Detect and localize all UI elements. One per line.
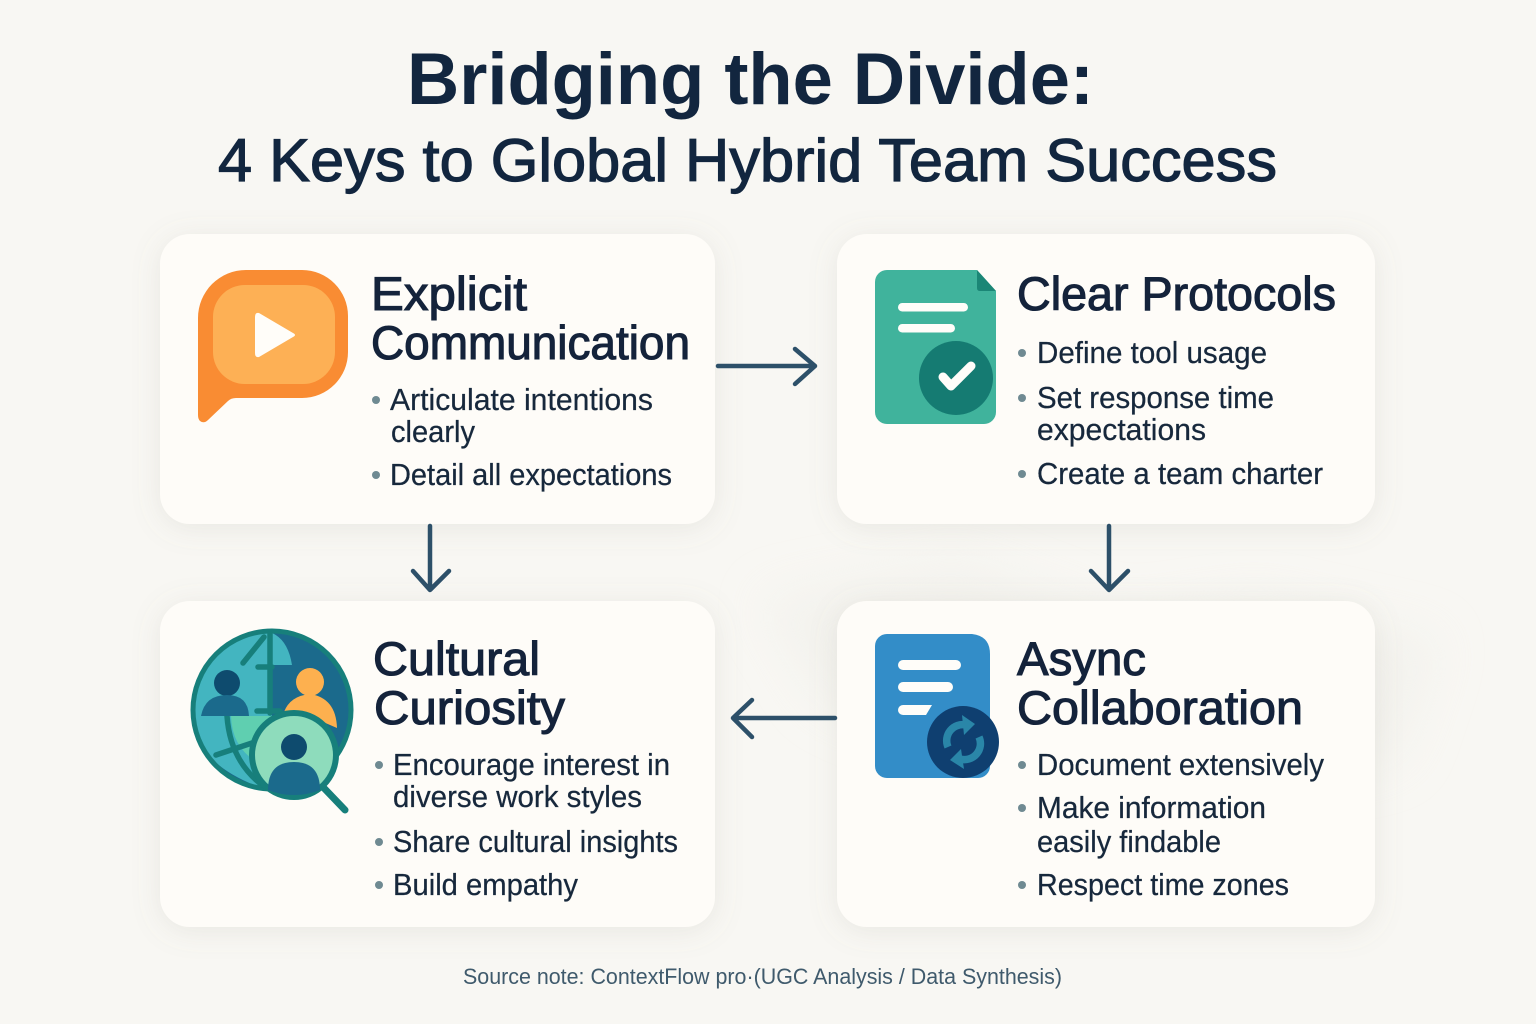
bullet list: Articulate intentions (390, 383, 653, 417)
bullet list: Respect time zones (1037, 868, 1289, 902)
icon: speech bubble with play button (198, 270, 348, 422)
bullet list: Define tool usage (1037, 336, 1267, 370)
source note: Source note: ContextFlow pro·(UGC Analysis / Data Synthesis) (463, 964, 1062, 989)
bullet list: Set response time (1037, 381, 1274, 415)
icon: document with check mark (875, 270, 996, 424)
bullet list: expectations (1037, 413, 1206, 447)
heading: Async (1017, 632, 1146, 685)
panel: explicit communication (160, 234, 715, 524)
bullet list: Detail all expectations (390, 458, 672, 492)
title: Bridging the Divide: (407, 39, 1094, 120)
heading: Clear Protocols (1017, 267, 1336, 320)
bullet list: Create a team charter (1037, 457, 1323, 491)
arrow: explicit communication to clear protocols (718, 349, 815, 384)
heading (1017, 632, 1303, 734)
bullet list (1018, 748, 1325, 902)
bullet list: Share cultural insights (393, 825, 678, 859)
bullet list: clearly (391, 415, 476, 449)
panel: async collaboration (837, 601, 1375, 927)
icon: document with sync arrows (875, 634, 999, 778)
title: 4 Keys to Global Hybrid Team Success (218, 127, 1277, 194)
bullet list: diverse work styles (393, 780, 642, 814)
icon: globe with people and magnifying glass (193, 631, 351, 810)
bullet list: easily findable (1037, 825, 1221, 859)
heading: Explicit (371, 267, 527, 320)
title (218, 39, 1277, 194)
bullet list (1018, 336, 1323, 491)
panel: clear protocols (837, 234, 1375, 524)
heading: Cultural (373, 632, 540, 685)
arrow: async collaboration to cultural curiosity (733, 700, 835, 737)
arrow: clear protocols to async collaboration (1091, 526, 1128, 590)
heading: Curiosity (374, 681, 566, 734)
bullet list: Document extensively (1037, 748, 1325, 782)
heading: Communication (371, 316, 690, 369)
bullet list: Build empathy (393, 868, 579, 902)
panel: cultural curiosity (160, 601, 715, 927)
heading (373, 632, 566, 734)
heading (371, 267, 690, 369)
bullet list (372, 383, 672, 492)
bullet list: Make information (1037, 791, 1266, 825)
arrow: explicit communication to cultural curiosity (413, 526, 449, 590)
bullet list (375, 748, 678, 902)
heading: Collaboration (1017, 681, 1303, 734)
bullet list: Encourage interest in (393, 748, 670, 782)
